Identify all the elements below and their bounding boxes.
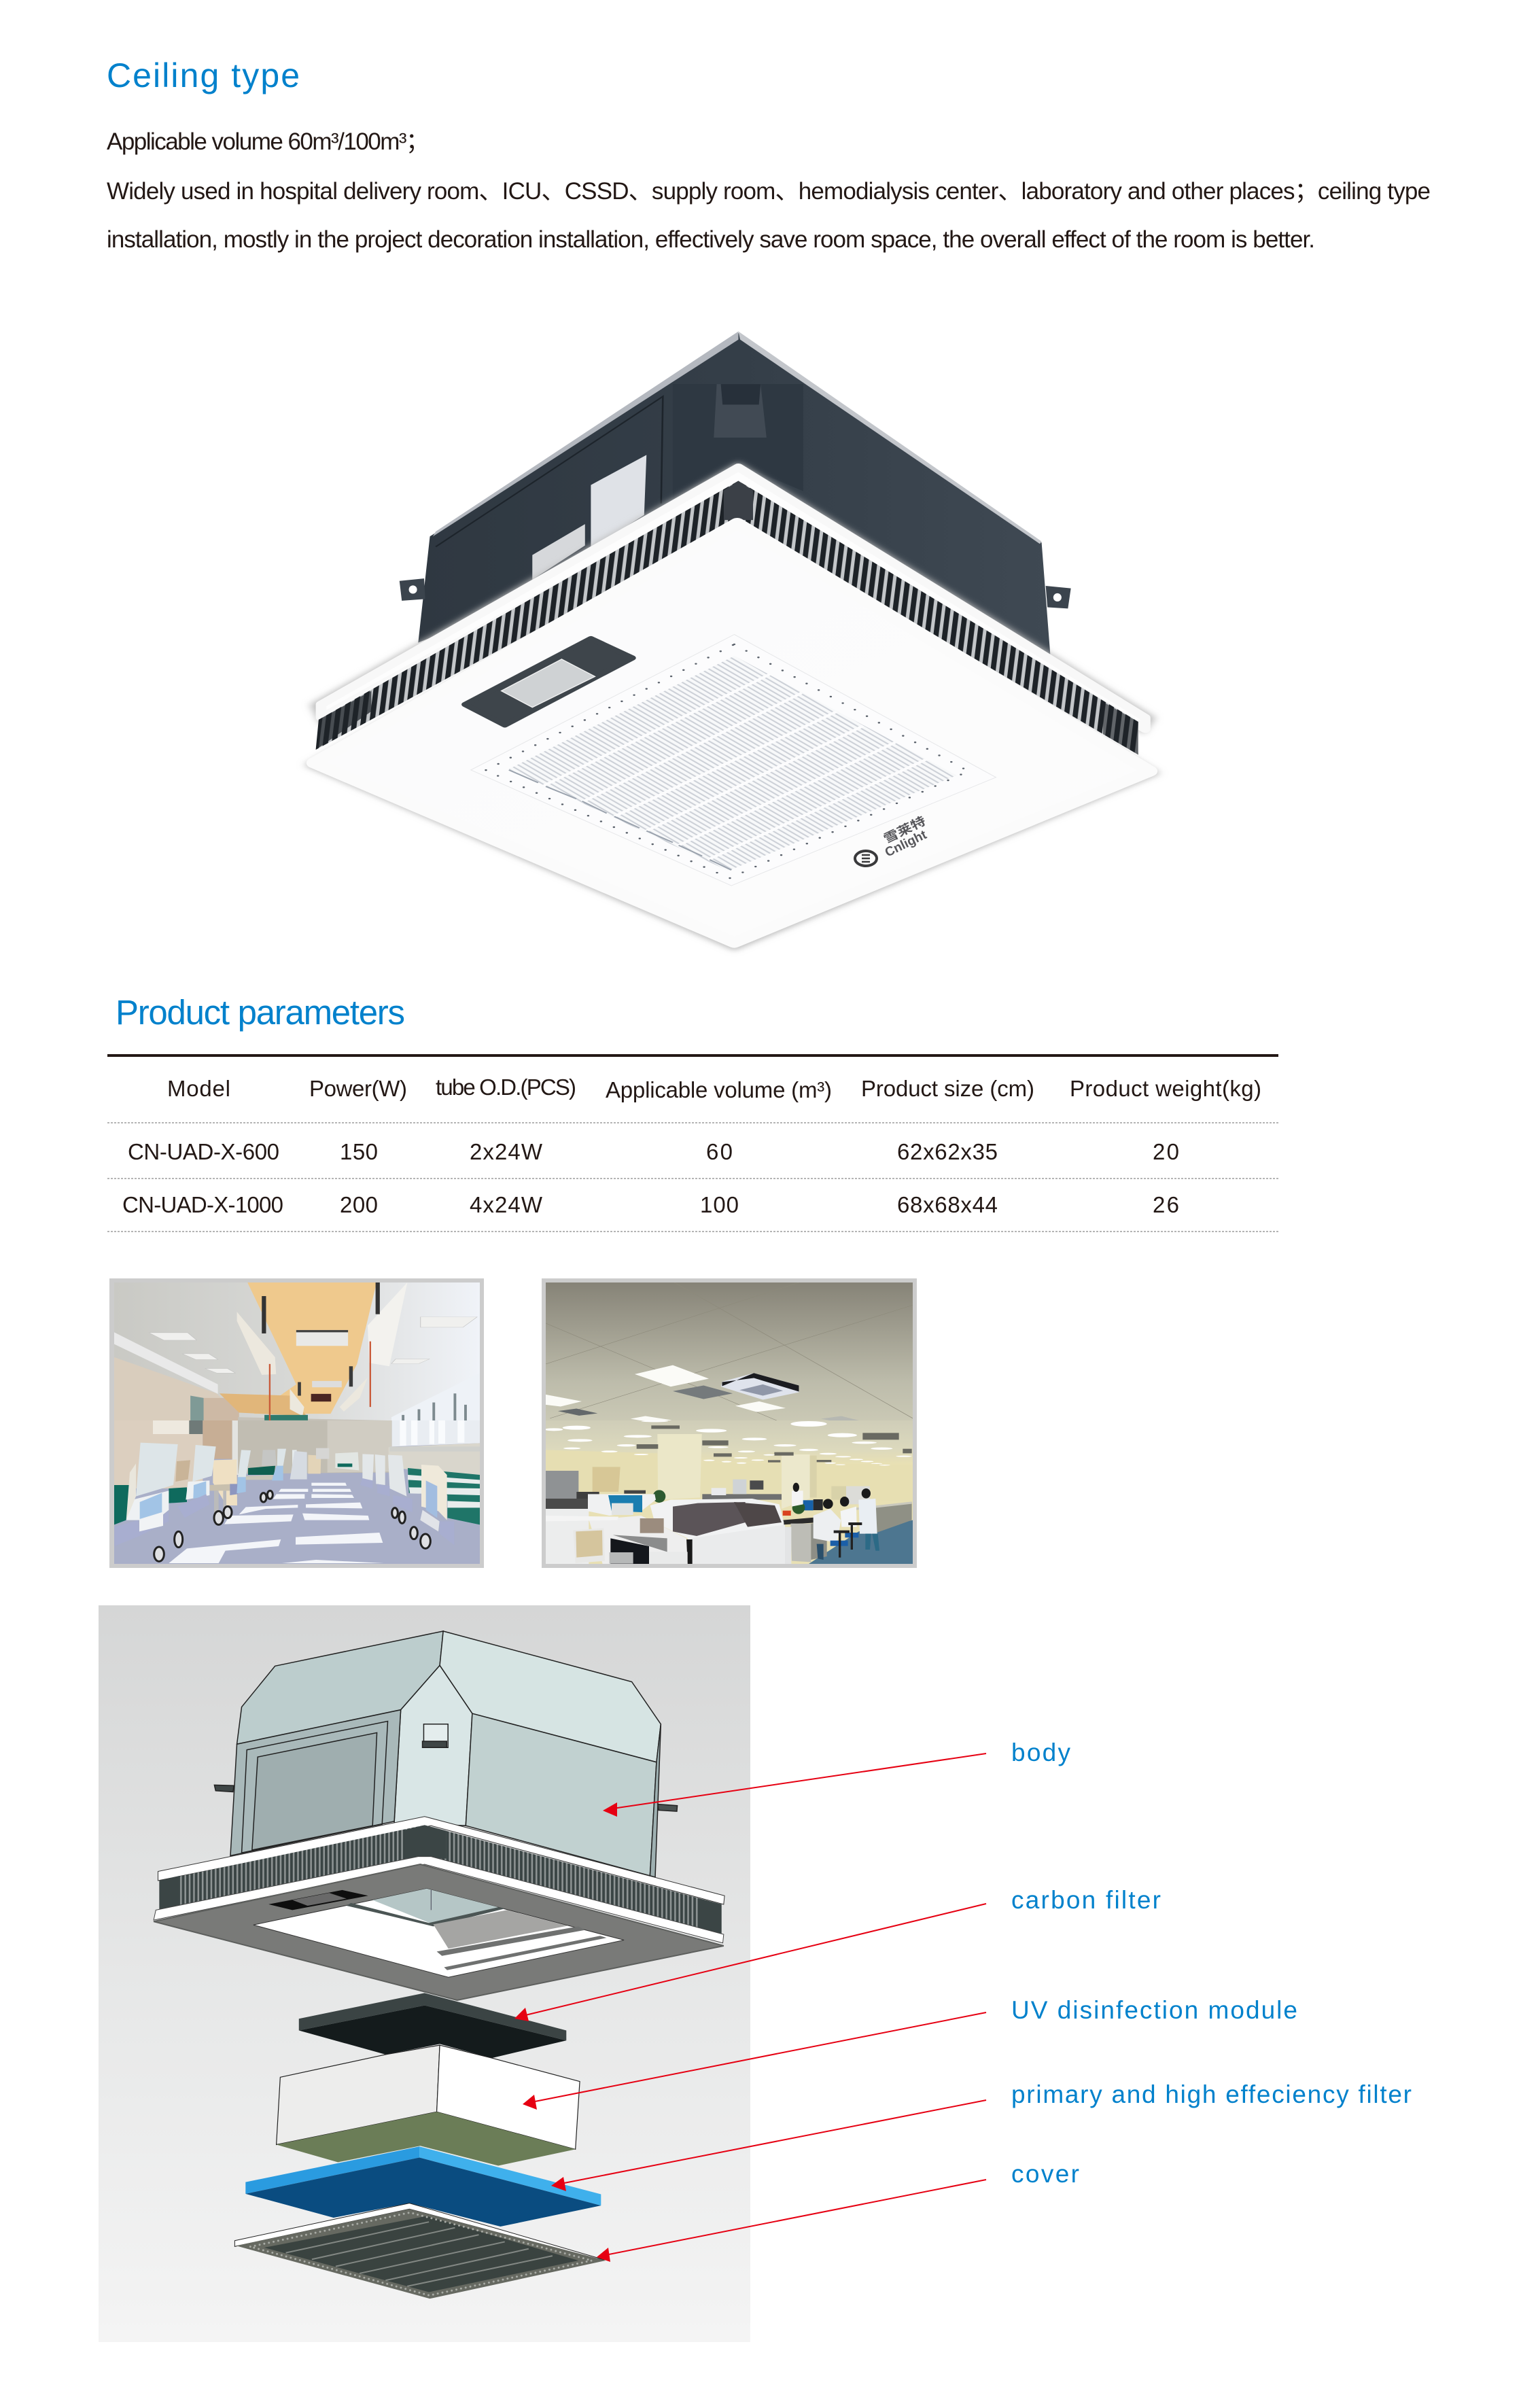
logo: Cnlight <box>883 828 930 860</box>
table header row: Product weight(kg) <box>1070 1076 1261 1101</box>
table row: CN-UAD-X-600: CN-UAD-X-600 <box>128 1139 279 1164</box>
table header row: Product size (cm) <box>861 1076 1034 1101</box>
lab lower area <box>546 1471 578 1499</box>
table header row <box>167 1075 1261 1102</box>
callout: carbon filter <box>514 1886 1161 2021</box>
part: primary and high efficiency filter <box>245 2112 601 2227</box>
shadow <box>304 518 1160 950</box>
heading: Product parameters: Product parameters <box>116 993 405 1032</box>
product photo: ceiling unit <box>304 332 1160 950</box>
title: Ceiling type: Ceiling type <box>107 56 300 94</box>
callout: primary and high effeciency filter <box>551 2080 1412 2191</box>
table header row: Applicable volume (m³) <box>606 1077 832 1102</box>
part: cover <box>234 2203 606 2299</box>
callout: primary and high effeciency filter: primary and high effeciency filter <box>1011 2080 1412 2108</box>
table row: CN-UAD-X-1000: 200 <box>340 1192 378 1217</box>
logo: 雪莱特 <box>881 814 928 846</box>
callout: carbon filter: carbon filter <box>1011 1886 1161 1914</box>
callout: body: body <box>1011 1739 1071 1766</box>
table row: CN-UAD-X-600: 62x62x35 <box>897 1139 998 1164</box>
upper frame <box>310 462 1156 734</box>
callout: UV disinfection module <box>523 1996 1297 2110</box>
table row: CN-UAD-X-600: 60 <box>706 1139 733 1164</box>
table row: CN-UAD-X-600: 150 <box>340 1139 378 1164</box>
intro text block: installation, mostly in the project decoration installation, effectively save room space, the overall effect of the room is better. <box>107 226 1315 253</box>
exploded view panel <box>99 1605 750 2342</box>
table row: CN-UAD-X-600: 20 <box>1153 1139 1179 1164</box>
callout: cover: cover <box>1011 2160 1079 2188</box>
cover plate <box>314 523 1150 943</box>
photo: hospital ward <box>109 1278 484 1568</box>
table header row: Model <box>167 1076 230 1101</box>
table row: CN-UAD-X-1000: 68x68x44 <box>897 1192 998 1217</box>
photo: laboratory <box>542 1278 917 1568</box>
table header row: Power(W) <box>309 1076 407 1101</box>
parameters table <box>107 1054 1278 1232</box>
table row: CN-UAD-X-1000: 26 <box>1153 1192 1179 1217</box>
table row: CN-UAD-X-1000: CN-UAD-X-1000 <box>122 1192 283 1217</box>
callout: UV disinfection module: UV disinfection module <box>1011 1996 1297 2024</box>
intro text block <box>107 128 1431 253</box>
table row: CN-UAD-X-600 <box>128 1139 1179 1164</box>
part: UV disinfection module <box>277 2045 580 2149</box>
logo <box>855 814 930 866</box>
callout: body <box>603 1739 1071 1817</box>
intro text block: Applicable volume 60m³/100m³； <box>107 128 430 155</box>
table row: CN-UAD-X-1000: 100 <box>700 1192 739 1217</box>
vents <box>316 481 738 750</box>
dark housing <box>418 333 1051 656</box>
part: carbon filter <box>299 1993 566 2058</box>
table header row: tube O.D.(PCS) <box>436 1075 576 1100</box>
table row: CN-UAD-X-1000 <box>122 1192 1179 1217</box>
callout: cover <box>597 2160 1079 2262</box>
table row: CN-UAD-X-1000: 4x24W <box>470 1192 543 1217</box>
intro text block: Widely used in hospital delivery room、ICU、CSSD、supply room、hemodialysis center、laboratory and other places；ceiling type <box>107 178 1431 205</box>
table row: CN-UAD-X-600: 2x24W <box>470 1139 543 1164</box>
part: body housing <box>214 1631 678 1877</box>
part: frame and vent ring <box>154 1817 724 2000</box>
display <box>465 639 633 725</box>
grille <box>471 635 996 886</box>
